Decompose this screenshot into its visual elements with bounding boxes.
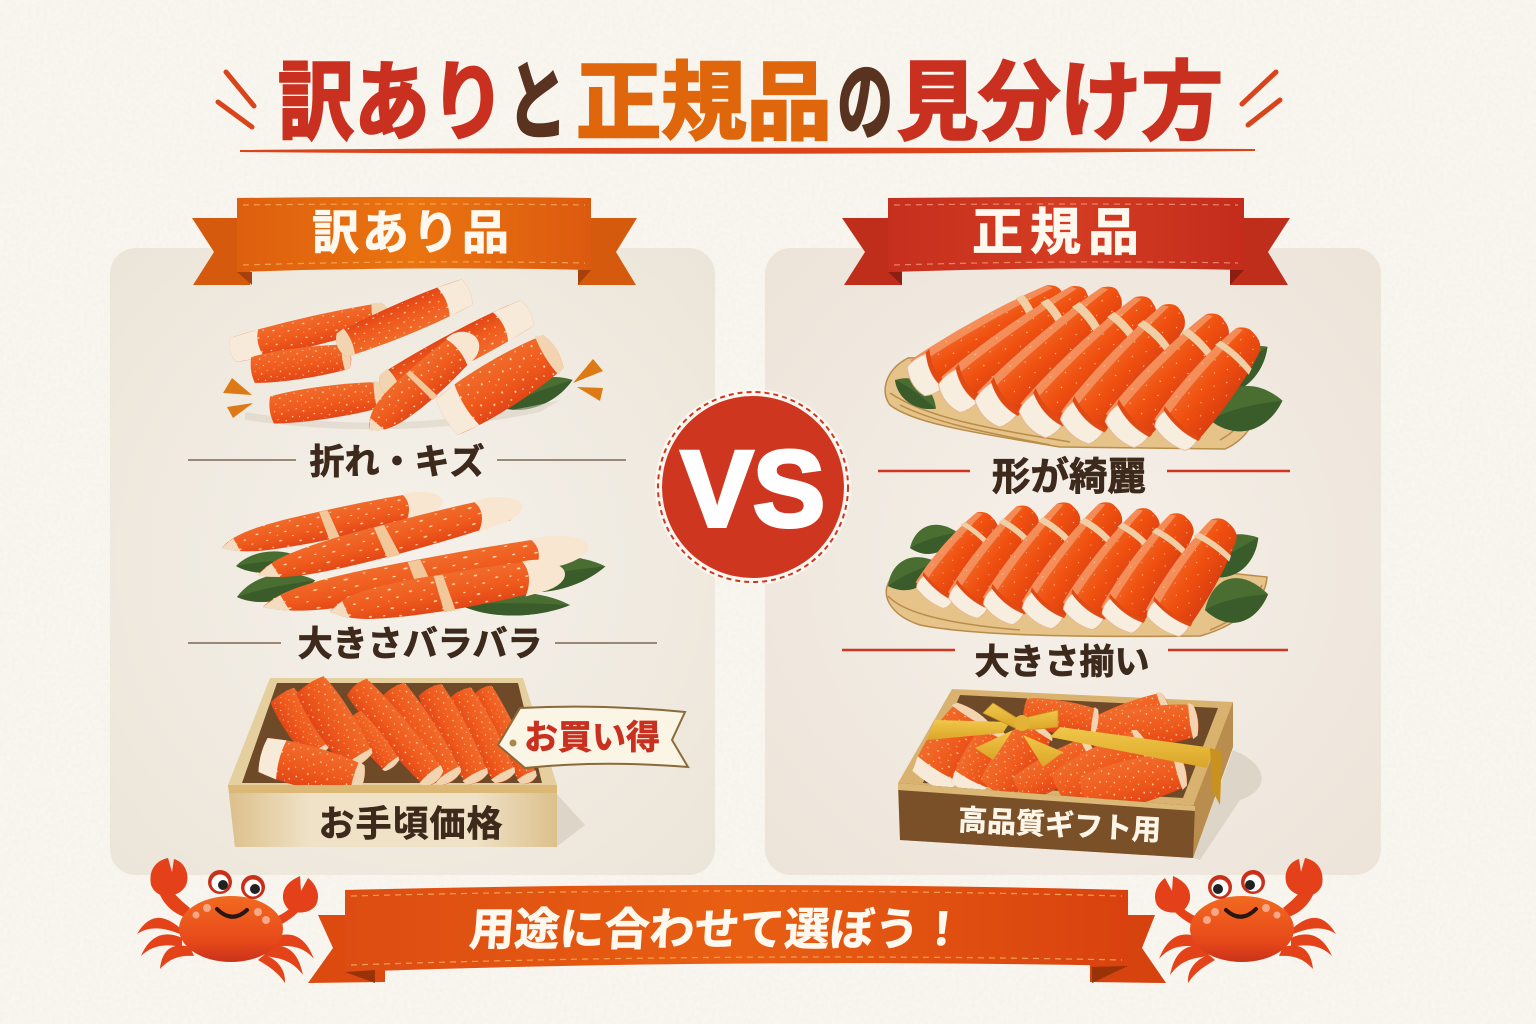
photo: neat crab legs on plate [885, 274, 1288, 456]
title [218, 55, 1280, 153]
photo: uniform crab legs on plate [881, 493, 1273, 641]
panel: 訳あり品 [110, 248, 715, 875]
panel: 正規品 [765, 248, 1381, 875]
banner: 訳あり品: 訳あり品 [312, 206, 512, 259]
photo: gift box of premium crab legs [898, 688, 1262, 860]
icon: left impact marks [223, 378, 253, 418]
badge: VS [655, 389, 851, 585]
title: の [837, 55, 893, 151]
banner: 用途に合わせて選ぼう！ [308, 885, 1166, 983]
banner: 正規品: 正規品 [972, 204, 1146, 261]
label: 形が綺麗: 形が綺麗 [992, 456, 1146, 499]
photo: wooden box of value crab legs [228, 673, 585, 848]
title: 正規品 [576, 55, 832, 151]
badge: VS: VS [681, 428, 825, 549]
tag: お買い得 [498, 707, 688, 768]
icon: right impact marks [573, 359, 603, 401]
icon: crab right [1155, 858, 1336, 983]
photo: gift box of premium crab legs: 高品質ギフト用 [957, 804, 1162, 847]
icon: crab left [137, 858, 318, 983]
title: 見分け方 [897, 55, 1223, 151]
banner: 訳あり品 [192, 197, 637, 285]
photo: wooden box of value crab legs: お手頃価格 [318, 803, 504, 844]
label: 折れ・キズ: 折れ・キズ [309, 442, 485, 482]
label: 大きさバラバラ: 大きさバラバラ [298, 625, 542, 664]
tag: お買い得: お買い得 [524, 719, 660, 757]
label: 大きさ揃い: 大きさ揃い [974, 643, 1150, 682]
title: と [507, 55, 567, 151]
banner: 用途に合わせて選ぼう！: 用途に合わせて選ぼう！ [468, 904, 966, 955]
photo: broken crab legs [226, 276, 577, 444]
title: 訳あり [278, 55, 506, 151]
photo: uneven crab legs [219, 486, 608, 631]
banner: 正規品 [842, 197, 1290, 285]
